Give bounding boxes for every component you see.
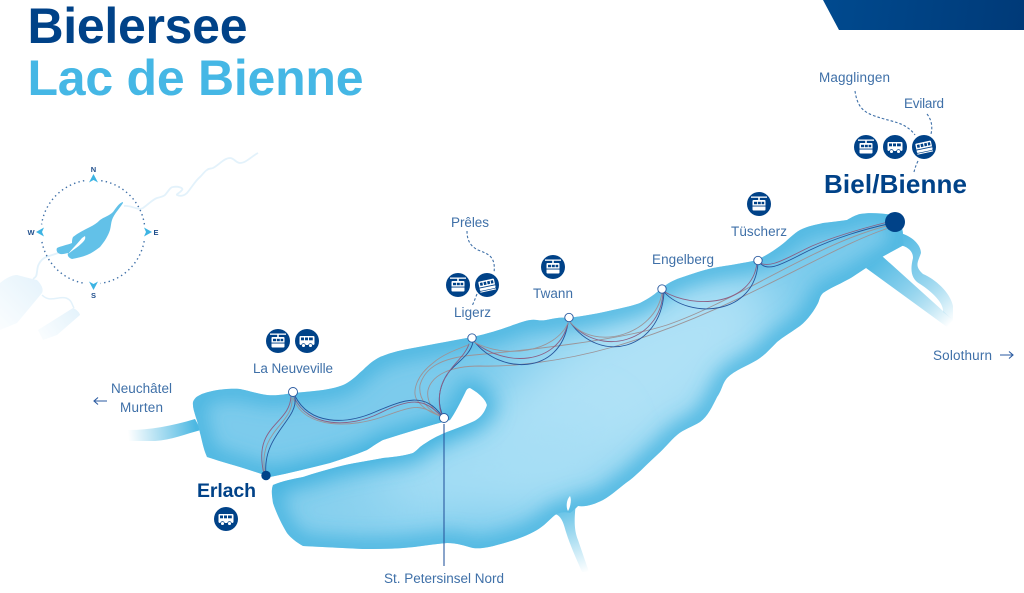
- label: Tüscherz: Tüscherz: [731, 224, 787, 239]
- label: Evilard: Evilard: [904, 96, 944, 111]
- routes: Ligerz to St. Petersinsel: [415, 342, 473, 416]
- dashed connector: Evilard: [927, 114, 932, 134]
- title: Lac de Bienne: [28, 50, 364, 106]
- routes: La Neuveville to St. Petersinsel: [293, 396, 442, 424]
- routes: Erlach to La Neuveville: [262, 396, 295, 475]
- icon: train Biel: [912, 135, 936, 159]
- label: Twann: Twann: [533, 286, 573, 301]
- lake: [192, 213, 903, 549]
- pier line: St. Petersinsel Nord: [443, 424, 445, 566]
- compass: W: [27, 228, 35, 237]
- dashed connector: Magglingen: [855, 91, 915, 135]
- routes: long-distance lines: [420, 224, 895, 416]
- small island in Hagneck delta: [567, 496, 571, 511]
- icon: cable car Twann: [541, 255, 565, 279]
- label: Neuchâtel Murten with arrow: Murten: [120, 400, 163, 415]
- header band: [823, 0, 1024, 30]
- icon: train Ligerz: [475, 273, 499, 297]
- routes: Ligerz to Twann: [472, 323, 568, 365]
- river: Neuchâtel canal: [128, 419, 201, 441]
- stop: Twann: [565, 313, 573, 322]
- routes: Engelberg to Tüscherz: [663, 263, 758, 309]
- mini lake: [57, 202, 123, 259]
- stop: Tüscherz: [754, 256, 762, 265]
- dashed connector: Biel/Bienne: [914, 161, 918, 172]
- faint regional waterways: [0, 153, 258, 340]
- title: [28, 0, 364, 106]
- label: Magglingen: Magglingen: [819, 70, 890, 85]
- label: Erlach: Erlach: [197, 480, 256, 502]
- icon: cable car Biel: [854, 135, 878, 159]
- compass: N: [91, 165, 96, 174]
- label: Biel/Bienne: Biel/Bienne: [824, 169, 967, 199]
- icon: cable car La Neuveville: [266, 329, 290, 353]
- dashed connector: Prêles: [467, 231, 494, 273]
- label: La Neuveville: La Neuveville: [253, 361, 333, 376]
- river: Aare canals towards Solothurn: [866, 233, 953, 327]
- river: Hagneck canal: [555, 502, 589, 572]
- routes: Tüscherz to Biel: [758, 222, 888, 267]
- label: St. Petersinsel Nord: St. Petersinsel Nord: [384, 571, 504, 586]
- stop: Erlach: [261, 471, 271, 480]
- label: Solothurn with arrow: Solothurn: [933, 348, 992, 363]
- dashed connector: Ligerz: [472, 294, 477, 306]
- compass: [27, 165, 159, 300]
- compass: S: [91, 291, 96, 300]
- icon: cable car Tüscherz: [747, 192, 771, 216]
- routes: Twann to Engelberg: [570, 293, 664, 347]
- label: Neuchâtel Murten with arrow: [94, 381, 172, 415]
- label: Prêles: Prêles: [451, 215, 489, 230]
- stop: La Neuveville: [288, 388, 298, 396]
- label: Neuchâtel Murten with arrow: Neuchâtel: [111, 381, 172, 396]
- label: Engelberg: Engelberg: [652, 252, 714, 267]
- boat routes: [262, 222, 895, 475]
- icon: bus Biel: [883, 135, 907, 159]
- stop: Biel/Bienne: [885, 212, 905, 232]
- icon: cable car Ligerz: [446, 273, 470, 297]
- stop: Ligerz: [468, 334, 476, 342]
- stop: Engelberg: [658, 285, 666, 293]
- compass: E: [153, 228, 159, 237]
- icon: bus Erlach: [214, 507, 238, 531]
- stop: St. Petersinsel Nord: [440, 414, 448, 422]
- label: Ligerz: Ligerz: [454, 305, 491, 320]
- icon: bus La Neuveville: [295, 329, 319, 353]
